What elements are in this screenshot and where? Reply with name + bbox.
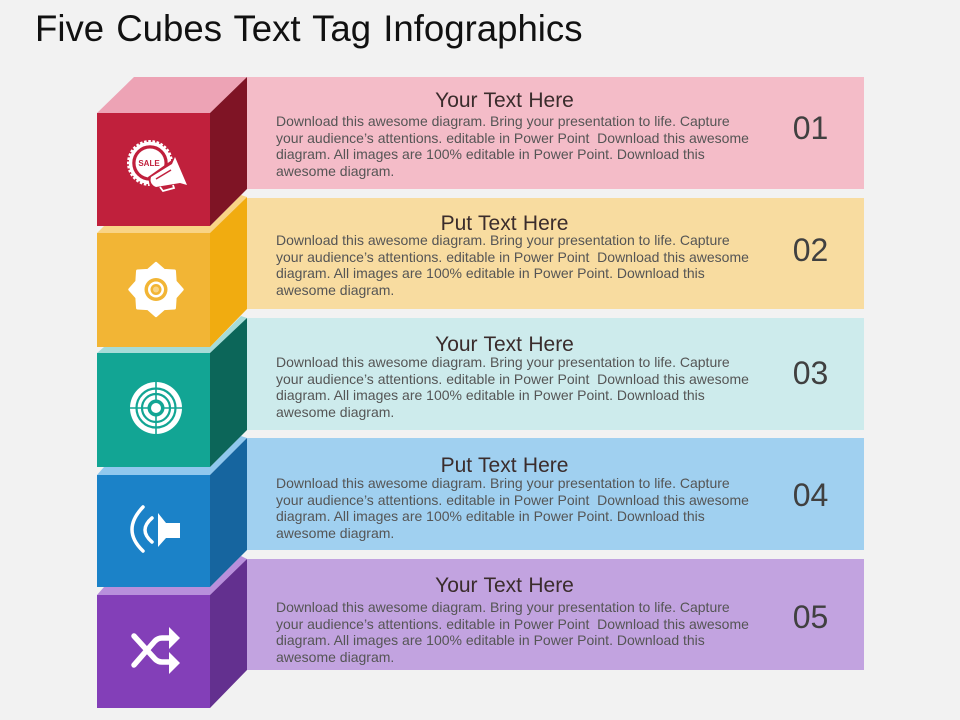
icon: shuffle arrows — [134, 627, 180, 674]
icon: speaker with sound waves — [132, 507, 180, 551]
text block 03: Download this awesome diagram. Bring your presentation to life. Capture your audience’s attentions. editable in Power Point Download this awesome diagram. All images are 100% editable in Power Point. Download this awesome diagram. — [276, 354, 749, 420]
title: Five Cubes Text Tag Infographics — [35, 8, 582, 49]
text block 01: Download this awesome diagram. Bring your presentation to life. Capture your audience’s attentions. editable in Power Point Download this awesome diagram. All images are 100% editable in Power Point. Download this awesome diagram. — [276, 113, 749, 179]
heading 01: Your Text Here — [435, 89, 574, 112]
icon: sale badge with megaphone — [128, 141, 190, 191]
cube 01 red — [97, 77, 247, 226]
icon: target — [130, 382, 182, 434]
heading 04: Put Text Here — [441, 454, 568, 477]
panel: row 03 text band — [247, 318, 864, 430]
number 03: 03 — [793, 355, 828, 391]
icon: sale badge with megaphone: SALE — [138, 159, 160, 168]
heading 05: Your Text Here — [435, 574, 574, 597]
number 02: 02 — [793, 232, 828, 268]
panel: row 04 text band — [247, 438, 864, 550]
heading 02: Put Text Here — [441, 212, 568, 235]
text block 05: Download this awesome diagram. Bring your presentation to life. Capture your audience’s attentions. editable in Power Point Download this awesome diagram. All images are 100% editable in Power Point. Download this awesome diagram. — [276, 599, 749, 665]
cube 05 purple — [97, 556, 247, 708]
text block 02: Download this awesome diagram. Bring your presentation to life. Capture your audience’s attentions. editable in Power Point Download this awesome diagram. All images are 100% editable in Power Point. Download this awesome diagram. — [276, 232, 749, 298]
panel: row 05 text band — [247, 559, 864, 670]
cube 03 teal — [97, 316, 247, 467]
heading 03: Your Text Here — [435, 333, 574, 356]
number 01: 01 — [793, 110, 828, 146]
cube 04 blue — [97, 436, 247, 587]
text block 04: Download this awesome diagram. Bring your presentation to life. Capture your audience’s attentions. editable in Power Point Download this awesome diagram. All images are 100% editable in Power Point. Download this awesome diagram. — [276, 475, 749, 541]
panel: row 01 text band — [247, 77, 864, 189]
number 04: 04 — [793, 477, 828, 513]
icon: gear — [130, 263, 182, 316]
number 05: 05 — [793, 599, 828, 635]
cube 02 yellow — [97, 195, 247, 347]
panel: row 02 text band — [247, 198, 864, 309]
